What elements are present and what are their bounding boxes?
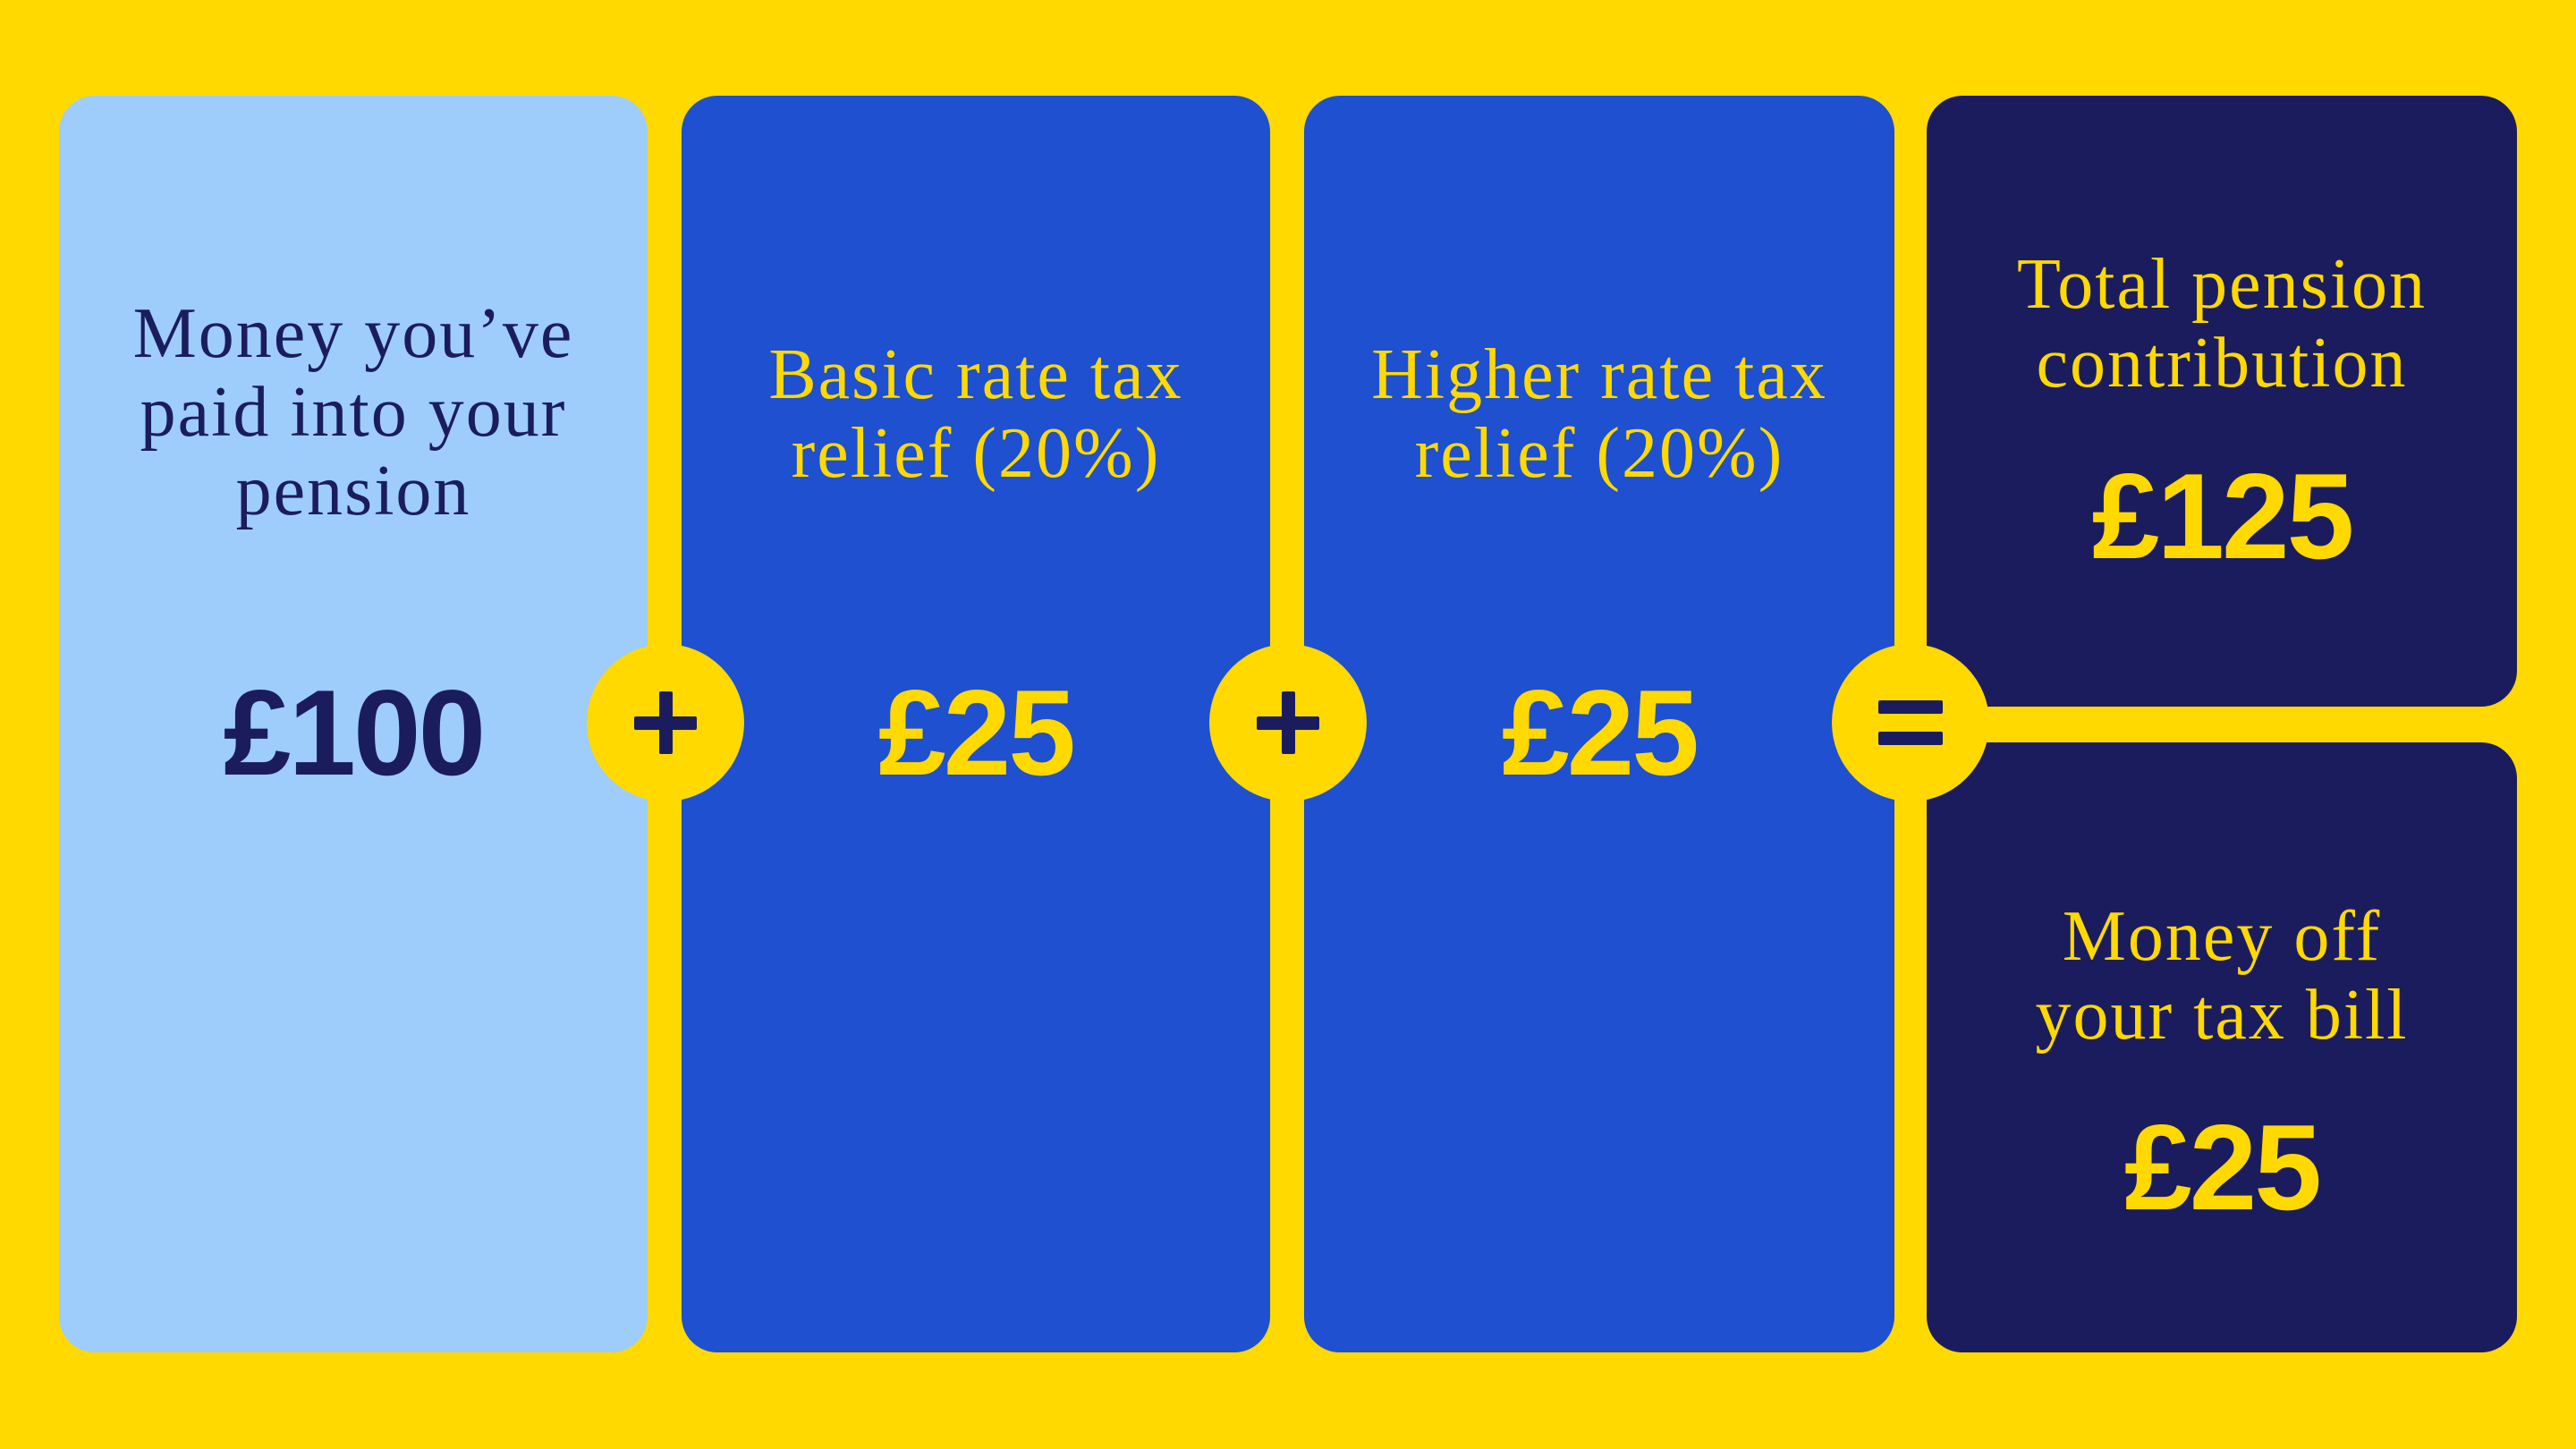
heading: higher rate: relief (20%) [1415, 414, 1784, 493]
number: £25 basic: £25 [878, 665, 1073, 801]
heading: basic rate [768, 335, 1183, 493]
heading: money paid [133, 294, 573, 530]
heading: money off [2035, 897, 2409, 1055]
panel: total pension contribution [1927, 96, 2517, 707]
panel: higher rate tax relief [1304, 96, 1894, 1352]
heading: total: Total pension [2017, 245, 2427, 324]
heading: basic rate: relief (20%) [792, 414, 1160, 493]
icon: plus 2 [1209, 644, 1367, 801]
heading: money off: your tax bill [2035, 976, 2409, 1055]
heading: total [2017, 245, 2427, 402]
panel: money off tax bill [1927, 742, 2517, 1352]
number: £125: £125 [2092, 448, 2351, 584]
panel: money you've paid [59, 96, 648, 1352]
icon: equals [1832, 644, 1989, 801]
heading: money paid: paid into your [140, 373, 566, 452]
heading: higher rate: Higher rate tax [1371, 335, 1827, 414]
heading: total: contribution [2036, 324, 2408, 402]
number: £100: £100 [224, 665, 483, 801]
heading: money paid: Money you’ve [133, 294, 573, 373]
number: £25 tax bill: £25 [2124, 1099, 2319, 1235]
heading: money off: Money off [2063, 897, 2381, 976]
number: £25 higher: £25 [1502, 665, 1697, 801]
heading: money paid: pension [236, 452, 470, 530]
icon: plus 1 [587, 644, 744, 801]
heading: higher rate [1371, 335, 1827, 493]
heading: basic rate: Basic rate tax [768, 335, 1183, 414]
panel: basic rate tax relief [682, 96, 1270, 1352]
